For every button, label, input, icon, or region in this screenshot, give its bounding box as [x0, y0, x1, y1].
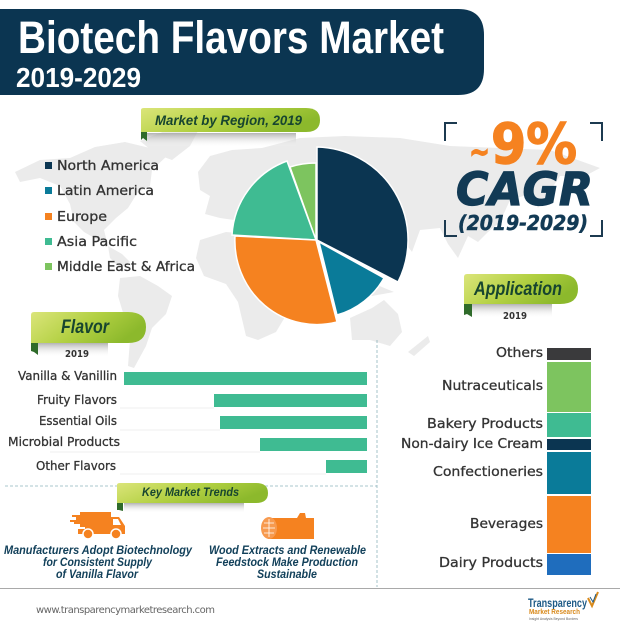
trend text: wood extracts: Wood Extracts and Renewable	[209, 543, 366, 557]
title years: 2019-2029	[16, 62, 141, 93]
trend text: vanilla flavor: for Consistent Supply	[43, 555, 153, 569]
legend item: Latin America: Latin America	[57, 183, 154, 199]
ribbon: application	[464, 274, 578, 318]
CAGR value: 9%	[491, 112, 577, 176]
trend text: vanilla flavor: of Vanilla Flavor	[56, 567, 139, 581]
segment: Bakery Products: Bakery Products	[427, 416, 543, 432]
slice: Europe	[235, 236, 337, 325]
bar: Vanilla and Vanillin	[18, 368, 367, 385]
CAGR callout	[445, 112, 602, 236]
trend text: vanilla flavor	[4, 543, 193, 581]
ribbon: application: Application	[473, 279, 562, 300]
slice: Asia Pacific	[232, 161, 316, 240]
legend item: Middle East and Africa: Middle East & Africa	[57, 259, 195, 275]
trend text: wood extracts: Sustainable	[257, 567, 317, 581]
legend item: Asia Pacific: Asia Pacific	[57, 234, 137, 250]
world map background	[15, 131, 600, 368]
segment: Nutraceuticals: Nutraceuticals	[442, 378, 543, 394]
slice: North America	[317, 147, 408, 282]
ribbon: flavor	[31, 312, 146, 357]
bar: Other Flavors	[36, 458, 367, 473]
bar: Microbial Products: Microbial Products	[8, 434, 120, 449]
segment: Confectioneries	[433, 452, 591, 494]
ribbon: key market trends	[117, 483, 268, 513]
website url: www.transparencymarketresearch.com	[36, 605, 215, 616]
trend text: wood extracts	[209, 543, 366, 581]
legend item: Europe: Europe	[57, 209, 107, 225]
stacked bar: application	[401, 345, 591, 575]
bar: Vanilla and Vanillin: Vanilla & Vanillin	[18, 368, 117, 383]
bar: Fruity Flavors: Fruity Flavors	[37, 392, 117, 407]
legend: regions	[45, 158, 195, 275]
bar: Essential Oils: Essential Oils	[39, 413, 117, 428]
corner brackets	[445, 123, 602, 236]
pie chart: market by region	[232, 147, 408, 325]
segment: Confectioneries: Confectioneries	[433, 464, 543, 480]
CAGR value: ~	[469, 132, 490, 172]
trend text: wood extracts: Feedstock Make Production	[216, 555, 358, 569]
segment: Beverages	[470, 496, 591, 553]
segment: Dairy Products: Dairy Products	[439, 555, 543, 571]
ribbon: key market trends: Key Market Trends	[142, 485, 239, 499]
bar: Fruity Flavors	[37, 392, 367, 407]
segment: Bakery Products	[427, 413, 591, 437]
application year: 2019	[503, 311, 527, 322]
bar: Essential Oils	[39, 413, 367, 429]
bar chart: flavor	[8, 368, 367, 474]
slice: Middle East and Africa	[290, 163, 316, 240]
logo: Transparency Market Research: Market Research	[529, 607, 580, 616]
segment: Others	[496, 345, 591, 361]
segment: Dairy Products	[439, 554, 591, 575]
bar: Microbial Products	[8, 434, 367, 451]
ribbon: market by region	[141, 108, 320, 147]
bar: Other Flavors: Other Flavors	[36, 458, 116, 473]
logo: Transparency Market Research: Insight Analysis Beyond Borders	[529, 617, 578, 621]
flavor year: 2019	[65, 349, 89, 360]
ribbon: flavor: Flavor	[61, 317, 110, 338]
CAGR label: CAGR	[456, 163, 593, 216]
logo: Transparency Market Research: Transparency	[528, 596, 587, 610]
legend item: North America: North America	[57, 158, 159, 174]
segment: Non-dairy Ice Cream: Non-dairy Ice Cream	[401, 436, 543, 452]
icon: delivery truck	[70, 512, 125, 539]
CAGR period: (2019-2029)	[458, 211, 588, 235]
segment: Others: Others	[496, 345, 543, 361]
main title: Biotech Flavors Market	[18, 12, 444, 63]
segment: Beverages: Beverages	[470, 516, 543, 532]
trend text: vanilla flavor: Manufacturers Adopt Biotechnology	[4, 543, 193, 557]
ribbon: market by region: Market by Region, 2019	[155, 112, 302, 128]
title banner	[0, 9, 484, 95]
slice: Latin America	[319, 242, 384, 315]
icon: wood log	[261, 513, 314, 539]
segment: Nutraceuticals	[442, 362, 591, 412]
logo: Transparency Market Research	[528, 592, 598, 621]
